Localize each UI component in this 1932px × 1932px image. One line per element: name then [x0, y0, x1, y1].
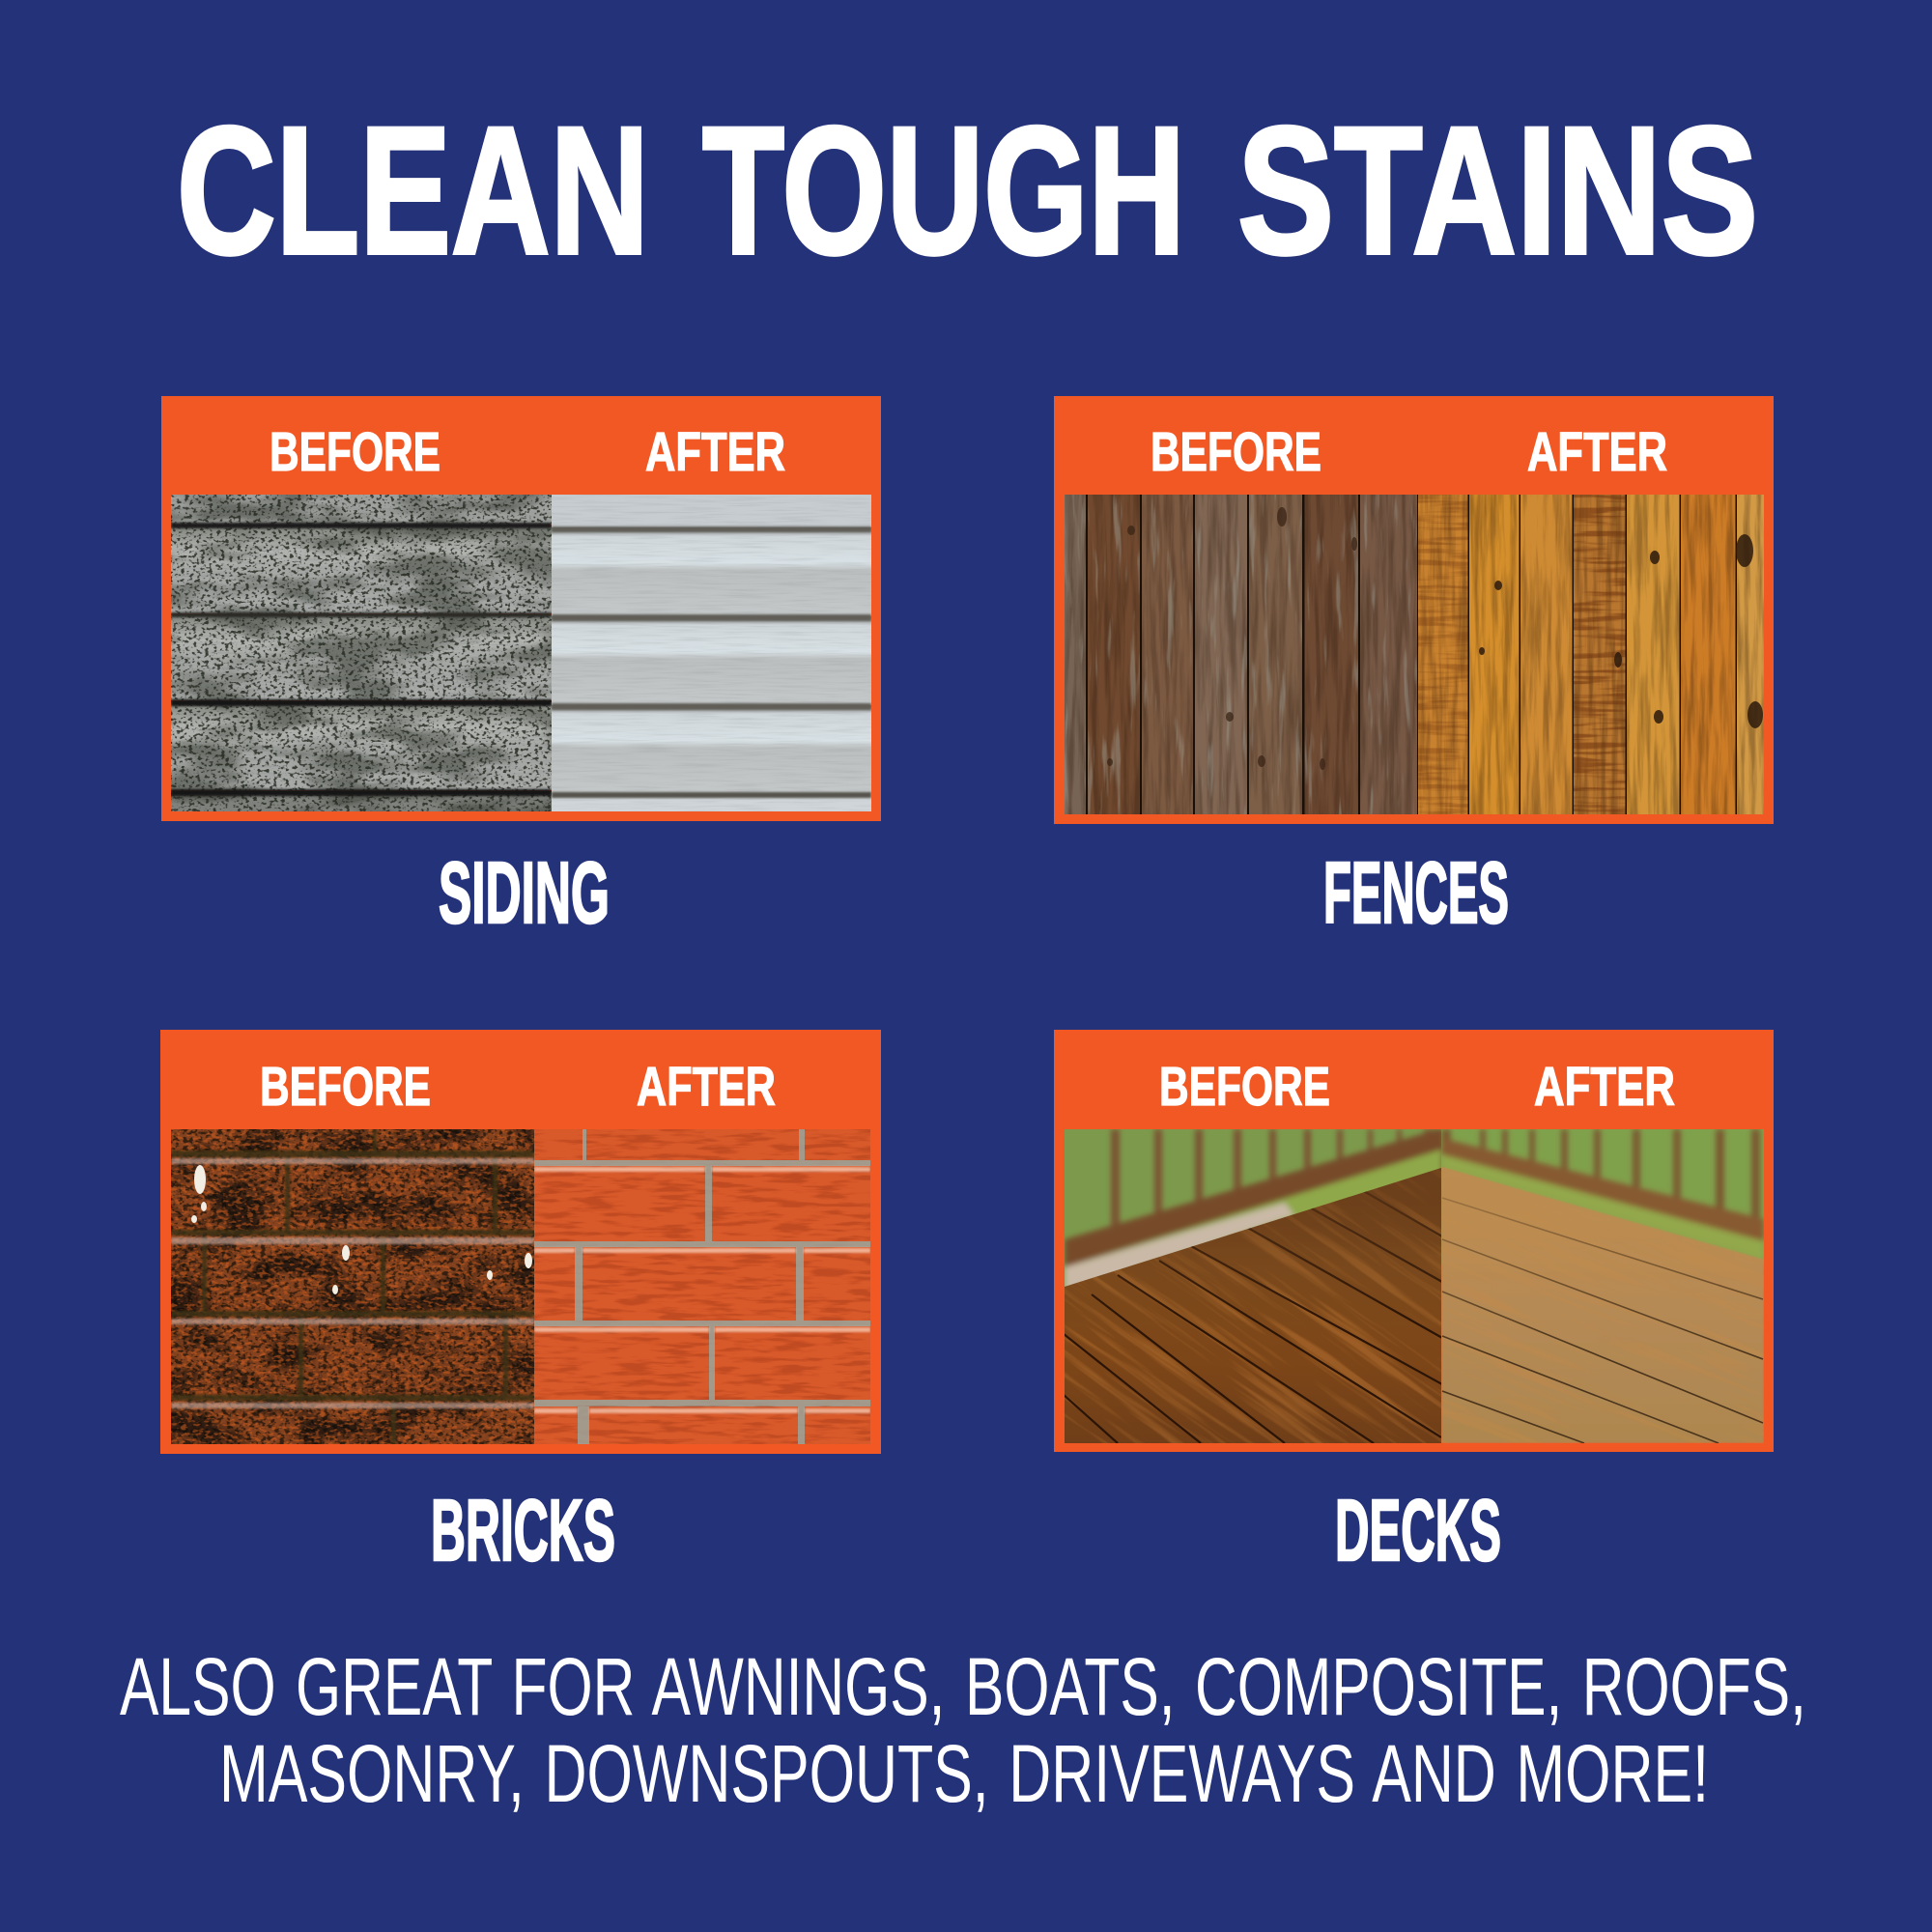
label: before: BEFORE — [1159, 1056, 1330, 1118]
label: before: BEFORE — [260, 1056, 431, 1118]
panel: decks — [1054, 1030, 1774, 1452]
caption: decks: DECKS — [1335, 1483, 1501, 1579]
caption: bricks: BRICKS — [431, 1483, 615, 1579]
photo: weathered deck — [1065, 1129, 1441, 1443]
photo: clean siding — [552, 495, 871, 811]
title: STAINS — [1237, 89, 1758, 292]
title: TOUGH — [702, 89, 1185, 292]
photo: weathered fence — [1065, 495, 1418, 814]
label: before: BEFORE — [1151, 421, 1321, 483]
panel: siding — [161, 396, 881, 821]
photo: restored fence — [1418, 495, 1764, 814]
photo: clean bricks — [534, 1129, 870, 1444]
panel: fences — [1054, 396, 1774, 824]
title — [177, 89, 1758, 292]
label: after: AFTER — [1527, 421, 1667, 483]
label: after: AFTER — [637, 1056, 776, 1118]
caption: fences: FENCES — [1323, 845, 1509, 942]
title: CLEAN — [177, 89, 649, 292]
label: before: BEFORE — [270, 421, 440, 483]
text block: also great for — [120, 1641, 1806, 1819]
caption: siding: SIDING — [439, 845, 610, 942]
panel: bricks — [160, 1030, 881, 1454]
label: after: AFTER — [645, 421, 785, 483]
photo: moldy siding — [171, 495, 552, 811]
photo: cleaned deck — [1441, 1129, 1764, 1443]
photo: dirty bricks — [171, 1129, 534, 1444]
label: after: AFTER — [1534, 1056, 1675, 1118]
